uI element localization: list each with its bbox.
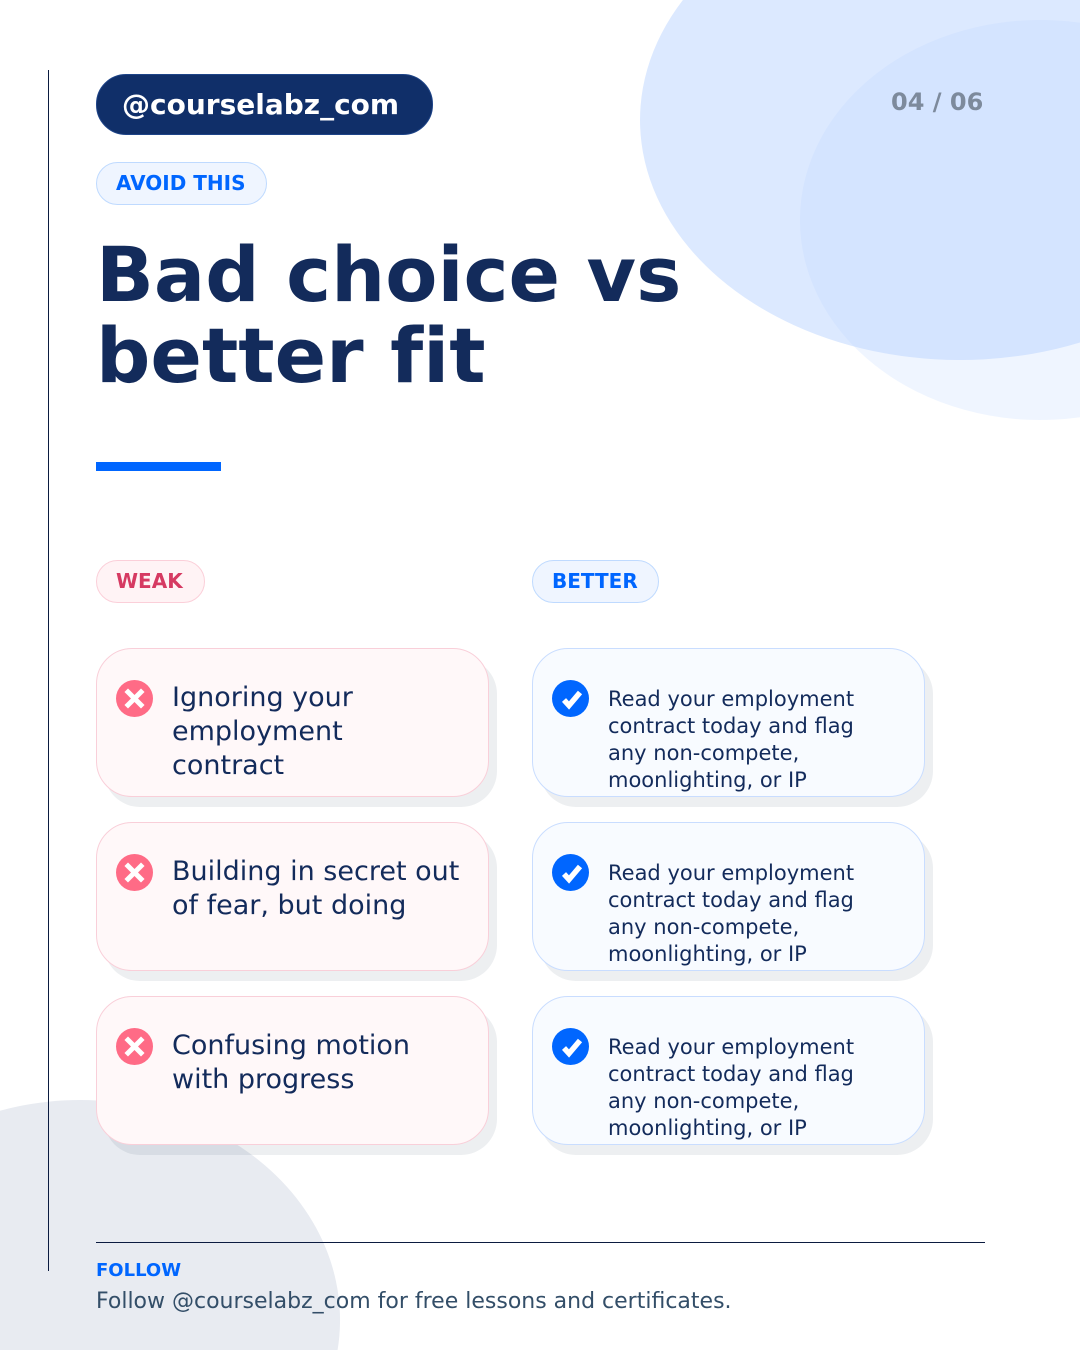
better card 2 [532,822,925,971]
footer rule [96,1242,985,1243]
weak text 3 [172,1030,410,1095]
blob: top right large [640,0,1080,360]
better text 1 [608,687,854,792]
icon: cross [116,1028,153,1065]
tag: weak [96,560,205,603]
weak text 3: with progress [172,1064,354,1095]
title [96,230,681,400]
better card 3 [532,996,925,1145]
weak text 1: Ignoring your [172,682,353,713]
better text 2: Read your employment [608,861,854,885]
better text 3: moonlighting, or IP [608,1116,807,1140]
better text 2: moonlighting, or IP [608,942,807,966]
better text 1: Read your employment [608,687,854,711]
better text 3: Read your employment [608,1035,854,1059]
better text 1: contract today and flag [608,714,854,738]
title: better fit [96,311,486,400]
better text 2: contract today and flag [608,888,854,912]
tag: avoid this: AVOID THIS [116,171,245,195]
blob: top right overlay [800,20,1080,420]
better text 3: any non-compete, [608,1089,799,1113]
weak card 3 [96,996,489,1145]
accent bar [96,462,221,471]
icon: check [552,1028,589,1065]
footer text: Follow @courselabz_com for free lessons and certificates. [96,1289,732,1314]
better text 3: contract today and flag [608,1062,854,1086]
footer label: FOLLOW [96,1260,181,1281]
weak text 2: of fear, but doing [172,890,406,921]
page counter: 04 / 06 [891,88,983,116]
weak card 2 [96,822,489,971]
weak card 1 [96,648,489,797]
weak text 1: employment [172,716,343,747]
vertical rule [48,70,49,1271]
better text 1: any non-compete, [608,741,799,765]
tag: weak: WEAK [116,569,183,593]
tag: avoid this [96,162,267,205]
better text 3 [608,1035,854,1140]
better text 2: any non-compete, [608,915,799,939]
weak text 2 [172,856,459,921]
weak text 3: Confusing motion [172,1030,410,1061]
better text 2 [608,861,854,966]
tag: better: BETTER [552,569,638,593]
blob: bottom left [0,1100,340,1350]
handle pill: @courselabz_com [122,88,399,121]
better card 1 [532,648,925,797]
title: Bad choice vs [96,230,681,319]
better text 1: moonlighting, or IP [608,768,807,792]
tag: better [532,560,659,603]
weak text 1: contract [172,750,284,781]
icon: check [552,680,589,717]
handle pill [96,74,433,135]
weak text 2: Building in secret out [172,856,459,887]
icon: cross [116,854,153,891]
icon: cross [116,680,153,717]
icon: check [552,854,589,891]
weak text 1 [172,682,353,781]
